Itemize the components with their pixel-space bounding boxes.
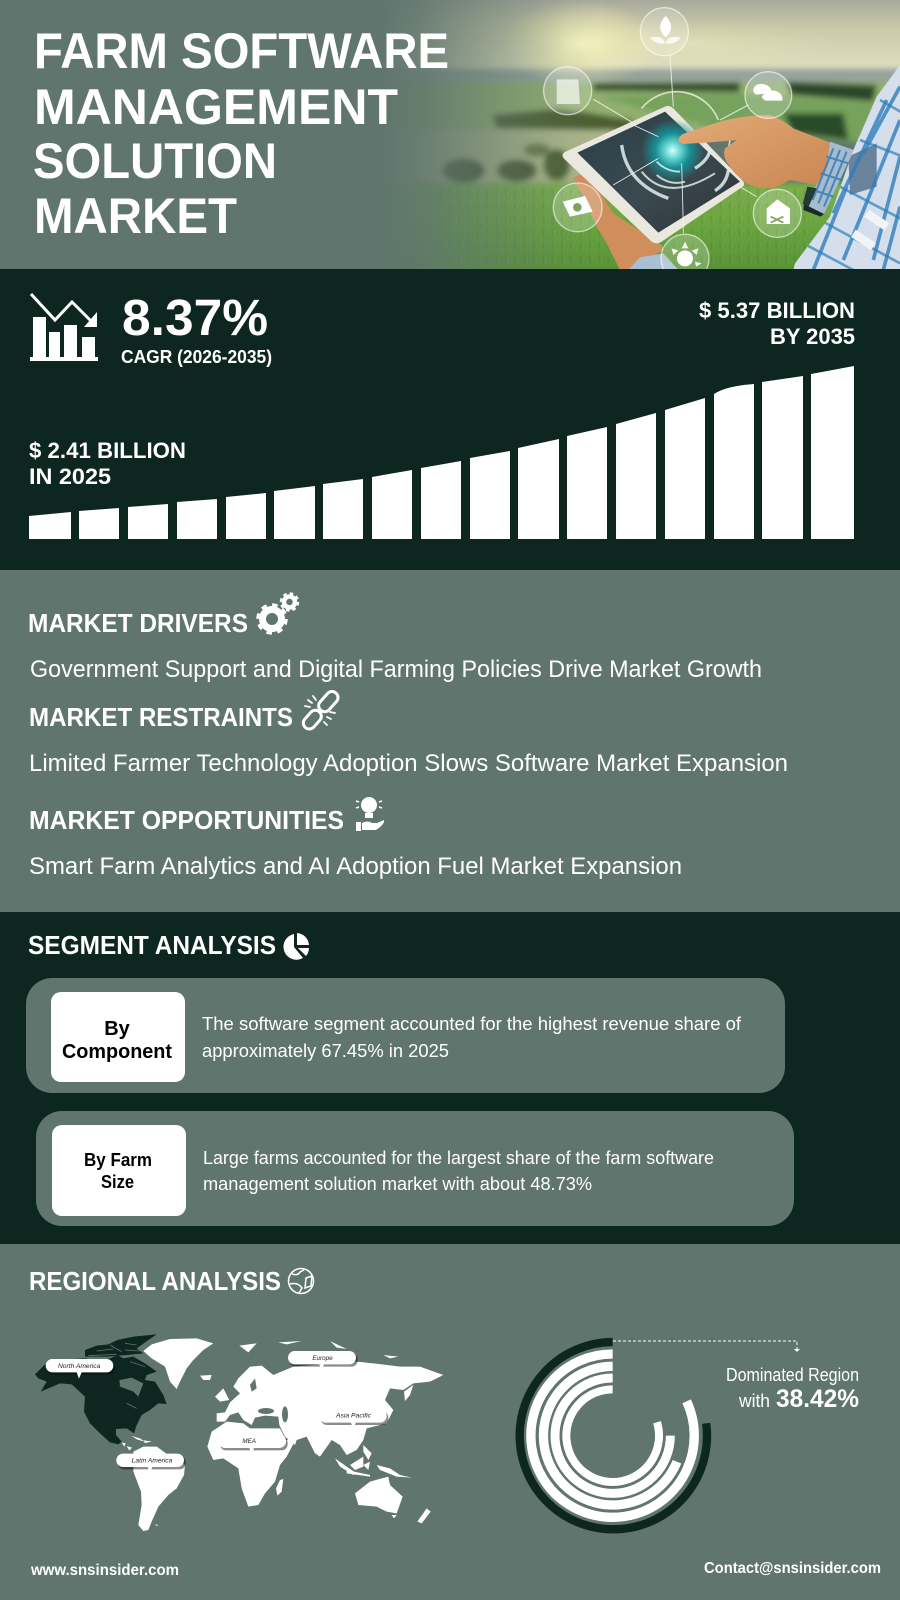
icon: gears — [258, 594, 298, 633]
icon: holding hand — [573, 175, 663, 270]
2035 value — [699, 298, 855, 349]
label box: By — [104, 1018, 131, 1040]
description: management solution market with about 48.73% — [203, 1173, 592, 1194]
2025 value: $ 2.41 BILLION — [29, 438, 186, 463]
CAGR value: 8.37% — [122, 289, 268, 346]
heading: segment analysis: SEGMENT ANALYSIS — [28, 930, 276, 960]
panel: market size — [0, 269, 900, 570]
title: SOLUTION — [33, 133, 277, 189]
heading: market drivers: MARKET DRIVERS — [28, 608, 248, 638]
description: The software segment accounted for the highest revenue share of — [202, 1013, 742, 1034]
icon: tablet — [563, 106, 744, 243]
2035 value: BY 2035 — [770, 324, 855, 349]
icon: lower sleeve — [628, 253, 678, 270]
radial bar chart — [520, 1342, 707, 1529]
panel: regional analysis — [29, 1266, 881, 1579]
header photo: farmer using tablet in field — [400, 0, 900, 269]
panel: market dynamics — [28, 594, 788, 880]
text: opportunities: Smart Farm Analytics and AI Adoption Fuel Market Expansion — [29, 853, 682, 880]
text: drivers: Government Support and Digital Farming Policies Drive Market Growth — [30, 656, 762, 683]
map: callouts — [46, 1351, 388, 1473]
callout: dominated region: 38.42% — [776, 1385, 859, 1413]
footer: contact: Contact@snsinsider.com — [704, 1560, 881, 1577]
2025 value — [29, 438, 186, 489]
callout: MEA — [218, 1434, 288, 1455]
label box: Size — [101, 1172, 134, 1192]
icon: pointing hand — [678, 115, 830, 188]
callout: Asia Pacific — [319, 1409, 388, 1429]
heading: market opportunities: MARKET OPPORTUNITIES — [29, 805, 344, 835]
map: Americas and Greenland — [35, 1334, 213, 1531]
icon: floating circles — [544, 8, 801, 282]
heading: market restraints: MARKET RESTRAINTS — [29, 702, 293, 732]
footer: website: www.snsinsider.com — [30, 1562, 179, 1579]
callout: dominated region: with — [738, 1391, 770, 1411]
text: restraints: Limited Farmer Technology Adoption Slows Software Market Expansion — [29, 750, 788, 777]
map: Europe, Africa, Asia, Oceania — [207, 1341, 443, 1523]
description — [202, 1013, 742, 1061]
label box — [52, 1125, 186, 1216]
icon: shirt cuff — [803, 142, 854, 217]
icon: circle glyphs — [557, 16, 790, 267]
label box: Component — [62, 1041, 172, 1063]
CAGR label: CAGR (2026-2035) — [121, 347, 272, 367]
icon: idea in hand — [356, 797, 384, 831]
bar chart — [29, 366, 854, 539]
panel: segment analysis — [0, 912, 900, 1244]
label box: By Farm — [84, 1150, 152, 1170]
description — [203, 1147, 714, 1194]
icon: broken link — [301, 689, 340, 731]
title: FARM SOFTWARE — [34, 23, 449, 79]
landscape — [367, 0, 900, 276]
icon: globe — [288, 1268, 314, 1294]
title: MARKET — [34, 188, 237, 244]
card: by farm size — [36, 1111, 794, 1226]
icon: chart with falling arrow — [30, 294, 98, 361]
callout: dominated region: Dominated Region — [726, 1365, 859, 1385]
callout: Latin America — [116, 1454, 186, 1473]
2035 value: $ 5.37 BILLION — [699, 298, 855, 323]
description: approximately 67.45% in 2025 — [202, 1040, 449, 1061]
label box — [51, 992, 185, 1082]
callout: Asia Pacific: Asia Pacific — [335, 1413, 372, 1420]
callout: Europe: Europe — [312, 1355, 333, 1362]
callout: North America: North America — [58, 1363, 101, 1370]
icon: pie chart — [283, 933, 309, 960]
description: Large farms accounted for the largest share of the farm software — [203, 1147, 714, 1168]
icon: connector lines — [593, 55, 757, 233]
title — [33, 23, 449, 244]
arrow: dashed leader — [613, 1341, 800, 1352]
callout: North America — [46, 1359, 115, 1379]
heading: regional analysis: REGIONAL ANALYSIS — [29, 1266, 281, 1296]
title: MANAGEMENT — [34, 79, 398, 135]
callout: Latin America: Latin America — [132, 1458, 173, 1465]
card: by component — [26, 978, 785, 1093]
world map — [35, 1334, 443, 1531]
map: North America highlighted — [35, 1334, 167, 1444]
callout: MEA: MEA — [242, 1438, 257, 1445]
map: Greenland, South America, islands — [122, 1338, 213, 1531]
icon: plaid shirt — [790, 63, 900, 273]
2025 value: IN 2025 — [29, 464, 111, 489]
callout: dominated region — [726, 1365, 859, 1413]
callout: Europe — [288, 1351, 358, 1370]
icon: data arc behind tablet — [642, 92, 730, 150]
